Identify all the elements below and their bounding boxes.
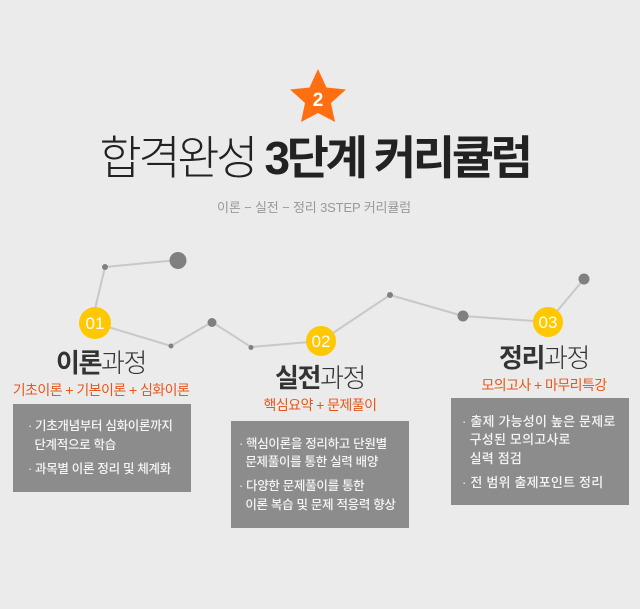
- text: theory bullets: · 과목별 이론 정리 및 체계화: [28, 462, 171, 476]
- timeline chart: 03: [539, 313, 557, 332]
- subheading: review: 모의고사 + 마무리특강: [481, 377, 607, 393]
- subheading: theory: 기초이론 + 기본이론 + 심화이론: [13, 382, 189, 398]
- subtitle: 이론 − 실전 − 정리 3STEP 커리큘럼: [217, 200, 411, 215]
- icon: star badge: [290, 69, 346, 122]
- text: theory bullets: · 기초개념부터 심화이론까지: [28, 419, 173, 433]
- text: review bullets: · 전 범위 출제포인트 정리: [462, 475, 603, 490]
- panel: practice: [231, 421, 409, 528]
- text: review bullets: · 출제 가능성이 높은 문제로: [462, 414, 616, 428]
- heading: 실전과정: 실전과정: [275, 363, 365, 393]
- text: review bullets: 구성된 모의고사로: [470, 432, 571, 447]
- panel: review: [451, 398, 629, 505]
- timeline chart: 01: [86, 314, 104, 333]
- subheading: practice: 핵심요약 + 문제풀이: [264, 397, 376, 413]
- text: practice bullets: 문제풀이를 통한 실력 배양: [245, 455, 378, 469]
- text: review bullets: 실력 점검: [470, 451, 522, 466]
- text: practice bullets: [239, 436, 396, 512]
- icon: star badge: 2: [313, 90, 323, 111]
- title: 합격완성 3단계 커리큘럼: [99, 132, 530, 184]
- text: review bullets: [462, 414, 616, 490]
- text: practice bullets: · 핵심이론을 정리하고 단원별: [239, 436, 387, 450]
- text: practice bullets: · 다양한 문제풀이를 통한: [239, 479, 364, 493]
- timeline chart: 02: [312, 332, 330, 351]
- panel: theory: [13, 404, 191, 492]
- text: theory bullets: [28, 419, 173, 476]
- text: practice bullets: 이론 복습 및 문제 적응력 향상: [245, 498, 396, 512]
- text: theory bullets: 단계적으로 학습: [34, 438, 116, 452]
- heading: 이론과정: 이론과정: [56, 348, 146, 378]
- heading: 정리과정: 정리과정: [499, 343, 589, 373]
